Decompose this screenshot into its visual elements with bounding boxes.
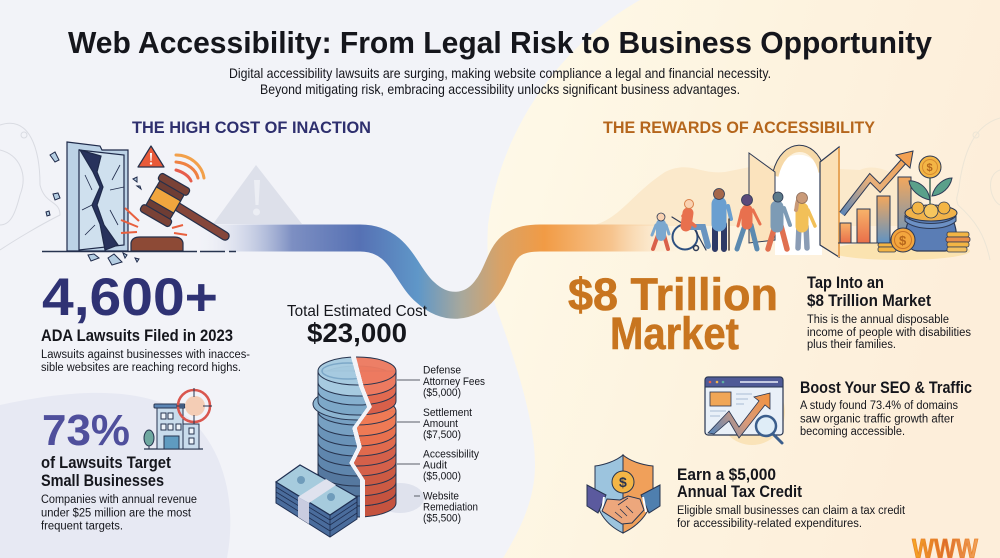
- stat: 73% small businesses: 73%: [42, 406, 130, 455]
- total cost heading: $23,000: [307, 318, 407, 348]
- cost labels: Audit: [423, 460, 447, 472]
- benefit: SEO and traffic: A study found 73.4% of domains: [800, 400, 958, 412]
- cost labels: ($5,500): [423, 512, 461, 524]
- benefit: tax credit: [677, 466, 906, 530]
- stat: 4,600+ lawsuits: ADA Lawsuits Filed in 2023: [41, 326, 233, 345]
- stat: 73% small businesses: under $25 million are the most: [41, 508, 192, 520]
- icon: shield handshake: [587, 455, 660, 533]
- stat: 73% small businesses: Small Businesses: [41, 471, 164, 490]
- benefit: tax credit: Earn a $5,000: [677, 466, 776, 484]
- benefit: tap into market: $8 Trillion Market: [807, 292, 931, 310]
- stat: 73% small businesses: of Lawsuits Target: [41, 453, 171, 472]
- stat: 73% small businesses: [41, 406, 197, 532]
- coin stacks: [878, 232, 970, 252]
- cost labels: ($5,000): [423, 470, 461, 482]
- warning triangle watermark: [213, 165, 302, 224]
- plant: [929, 178, 931, 205]
- stat: 73% small businesses: Companies with annual revenue: [41, 494, 197, 506]
- hills behind rewards illustration: [590, 165, 935, 230]
- icon: targeted building: [144, 388, 212, 449]
- warning icon: [138, 146, 164, 167]
- intro text: Beyond mitigating risk, embracing accessibility unlocks significant business advantages.: [260, 81, 740, 97]
- woman in red: [737, 194, 760, 249]
- dollar coin on plant: [919, 156, 941, 178]
- money pot: [905, 214, 956, 251]
- leader lines: [397, 380, 420, 496]
- benefit: tax credit: Eligible small businesses can claim a tax credit: [677, 505, 906, 517]
- benefit: tax credit: for accessibility-related expenditures.: [677, 518, 862, 530]
- cracked door: [67, 142, 128, 251]
- chart: split coin stack: [313, 357, 424, 517]
- cost labels: Accessibility: [423, 448, 479, 460]
- icon: shield handshake: $: [619, 474, 627, 490]
- ground glow: [830, 242, 970, 260]
- front dollar coin: [891, 228, 915, 252]
- cost labels: Remediation: [423, 502, 478, 514]
- intro text: Digital accessibility lawsuits are surging, making website compliance a legal and financial necessity.: [229, 65, 771, 81]
- ground line: [42, 250, 236, 252]
- big stat: $8 trillion market: Market: [610, 308, 739, 359]
- person in grey-blue: [768, 192, 790, 249]
- growth arrow: [842, 151, 913, 214]
- woman in yellow: [796, 192, 815, 248]
- child: [652, 213, 669, 249]
- big stat: $8 trillion market: [568, 269, 778, 359]
- total cost heading: [287, 303, 428, 348]
- blue half: [312, 356, 367, 518]
- impact sparks: [121, 208, 187, 235]
- left door leaf: [749, 153, 775, 243]
- front dollar coin: $: [899, 233, 907, 248]
- icon: cash bundle: [276, 465, 357, 537]
- stat: 4,600+ lawsuits: Lawsuits against businesses with inacces-: [41, 349, 250, 361]
- gavel head: [139, 172, 191, 228]
- background: cream right side: [487, 0, 1000, 558]
- cost labels: Amount: [423, 418, 458, 430]
- cost labels: Website: [423, 490, 459, 502]
- cost labels: ($5,000): [423, 387, 461, 399]
- wheelchair user: [672, 200, 708, 250]
- dollar coin on plant: $: [926, 162, 933, 174]
- big stat: $8 trillion market: $8 Trillion: [568, 269, 778, 320]
- decorative contour lines right: [957, 118, 1000, 260]
- benefit: SEO and traffic: [800, 379, 972, 438]
- man with cane: [714, 188, 731, 250]
- shards: [46, 152, 141, 265]
- gavel handle: [178, 207, 225, 236]
- stat: 4,600+ lawsuits: 4,600+: [42, 268, 218, 327]
- benefit: tap into market: Tap Into an: [807, 274, 884, 292]
- background: lower left blob: [0, 393, 230, 558]
- benefit: tap into market: plus their families.: [807, 339, 896, 351]
- stat: 4,600+ lawsuits: sible websites are reaching record highs.: [41, 362, 241, 374]
- right door leaf: [820, 147, 839, 257]
- cost labels: Attorney Fees: [423, 376, 485, 388]
- shadow: [376, 483, 424, 513]
- intro text: [229, 65, 771, 97]
- illustration: cracked wall and gavel: [42, 142, 236, 265]
- section heading: cost of inaction: THE HIGH COST OF INACTION: [132, 118, 371, 137]
- sound block: [131, 237, 183, 251]
- title: Web Accessibility: From Legal Risk to Business Opportunity: [68, 25, 933, 60]
- total cost heading: Total Estimated Cost: [287, 303, 428, 320]
- people group: [652, 188, 815, 250]
- illustration: open door, people and growth: [652, 145, 970, 260]
- benefit: SEO and traffic: saw organic traffic growth after: [800, 414, 954, 426]
- flowing ribbon: [195, 238, 680, 305]
- decorative contour lines left: [0, 123, 60, 250]
- red half: [354, 356, 396, 518]
- cost labels: ($7,500): [423, 429, 461, 441]
- sound arcs: [176, 155, 204, 181]
- benefit: tax credit: Annual Tax Credit: [677, 483, 802, 501]
- cost labels: Settlement: [423, 407, 472, 419]
- arch: [775, 155, 822, 255]
- benefit: tap into market: [807, 274, 971, 351]
- benefit: SEO and traffic: Boost Your SEO & Traffic: [800, 379, 972, 397]
- benefit: tap into market: income of people with disabilities: [807, 327, 971, 339]
- stat: 4,600+ lawsuits: [41, 268, 250, 374]
- icon: browser SEO chart: [705, 377, 785, 445]
- stat: 73% small businesses: frequent targets.: [41, 520, 123, 532]
- section heading: rewards: THE REWARDS OF ACCESSIBILITY: [603, 118, 876, 137]
- cost labels: Defense: [423, 364, 461, 376]
- benefit: tap into market: This is the annual disposable: [807, 314, 949, 326]
- benefit: SEO and traffic: becoming accessible.: [800, 426, 905, 438]
- bars: [840, 177, 911, 243]
- cost labels: [423, 364, 485, 524]
